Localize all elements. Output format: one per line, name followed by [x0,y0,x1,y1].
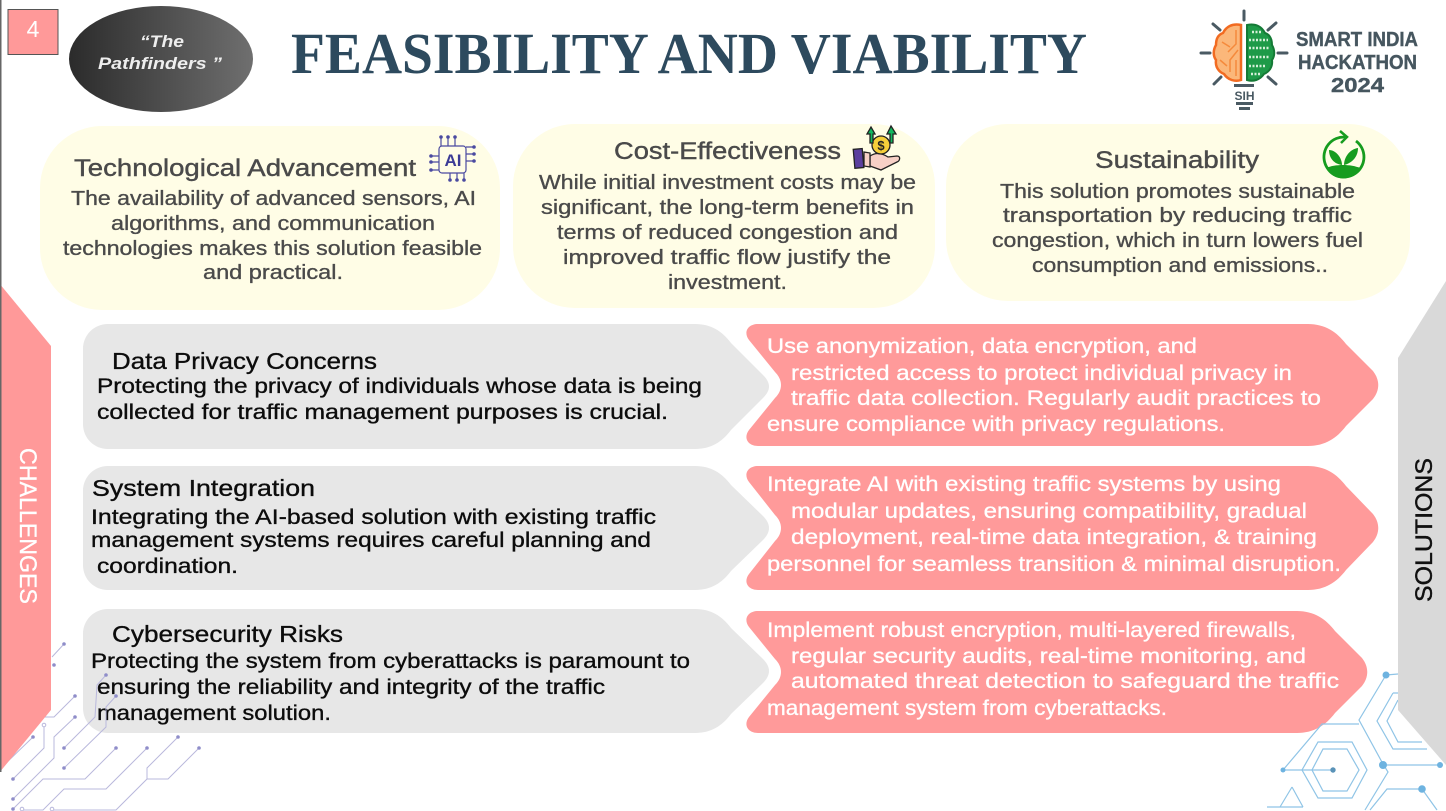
solution: data privacy: ensure compliance with privacy regulations. [767,413,1225,436]
circuit decoration: bottom right [1267,674,1440,810]
solution: data privacy [746,324,1378,446]
solution: data privacy: Use anonymization, data encryption, and [767,335,1197,358]
challenge: system integration: Integrating the AI-based solution with existing traffic [91,506,656,529]
solution: system integration: personnel for seamless transition & minimal disruption. [767,553,1341,576]
challenge: system integration: management systems requires careful planning and [91,529,651,552]
panel: sustainability [946,124,1410,301]
challenge: cybersecurity risks: management solution. [97,702,331,725]
logo brain left [1214,24,1241,81]
icon: sprout in circle [1324,131,1364,179]
panel: technological advancement: technologies makes this solution feasible [63,237,482,260]
logo: Smart India Hackathon 2024 [1201,11,1418,110]
band: challenges: CHALLENGES [14,448,41,604]
panel: cost-effectiveness [513,124,935,308]
panel: technological advancement [40,126,500,310]
panel: technological advancement: Technological Advancement [74,155,416,182]
slide number: 4 [27,16,40,42]
challenge: cybersecurity risks: ensuring the reliability and integrity of the traffic [97,676,605,699]
panel: sustainability: consumption and emissions.. [1032,254,1328,277]
icon: AI chip [429,135,476,182]
team name badge: Pathfinders ” [98,54,223,73]
logo rays [1201,11,1287,84]
solution: system integration [746,466,1378,590]
title: FEASIBILITY AND VIABILITY [291,21,1087,86]
circuit decoration: bottom left [2,644,199,811]
solution: system integration: deployment, real-time data integration, & training [791,526,1317,549]
logo circuit traces [1220,30,1238,76]
logo bulb base [1234,84,1254,110]
panel: cost-effectiveness: investment. [668,271,787,294]
logo binary [1249,32,1270,74]
panel: cost-effectiveness: improved traffic flow justify the [563,246,891,269]
panel: sustainability: transportation by reducing traffic [1003,204,1352,227]
solution: data privacy: traffic data collection. Regularly audit practices to [791,387,1321,410]
challenge: data privacy: collected for traffic management purposes is crucial. [97,401,668,424]
band: challenges [2,286,51,770]
challenge: system integration: coordination. [97,555,238,578]
icon: AI chip: AI [444,151,462,170]
challenge: system integration: System Integration [92,475,315,501]
challenge: data privacy: Data Privacy Concerns [112,348,377,374]
solution: cybersecurity risks [746,611,1367,733]
panel: technological advancement: The availability of advanced sensors, AI [71,187,476,210]
challenge: system integration [83,466,769,590]
solution: data privacy: restricted access to protect individual privacy in [791,362,1292,385]
logo: Smart India Hackathon 2024: HACKATHON [1298,52,1417,74]
panel: cost-effectiveness: Cost-Effectiveness [614,138,841,165]
challenge: cybersecurity risks: Cybersecurity Risks [112,621,343,647]
logo: Smart India Hackathon 2024: SMART INDIA [1296,29,1418,51]
icon: hand with coin: $ [877,138,885,153]
panel: sustainability: Sustainability [1095,147,1259,174]
panel: sustainability: congestion, which in turn lowers fuel [992,229,1363,252]
panel: technological advancement: and practical. [203,261,343,284]
icon: hand with coin [853,126,900,170]
solution: cybersecurity risks: regular security audits, real-time monitoring, and [791,645,1306,668]
panel: technological advancement: algorithms, and communication [111,212,435,235]
panel: cost-effectiveness: While initial investment costs may be [539,171,916,194]
panel: cost-effectiveness: terms of reduced congestion and [557,221,898,244]
solution: cybersecurity risks: Implement robust encryption, multi-layered firewalls, [767,619,1296,642]
team name badge: “The [140,32,184,51]
challenge: cybersecurity risks: Protecting the system from cyberattacks is paramount to [91,650,690,673]
slide number [8,10,58,54]
challenge: cybersecurity risks [83,609,769,733]
challenge: data privacy: Protecting the privacy of individuals whose data is being [97,375,702,398]
left edge line [0,0,2,772]
challenge: data privacy [83,324,769,449]
panel: cost-effectiveness: significant, the long-term benefits in [541,196,914,219]
solution: cybersecurity risks: automated threat detection to safeguard the traffic [791,670,1339,693]
circuit nodes: bottom left [11,642,201,811]
solution: system integration: modular updates, ensuring compatibility, gradual [791,500,1307,523]
solution: cybersecurity risks: management system from cyberattacks. [767,697,1167,720]
band: solutions: SOLUTIONS [1411,458,1438,602]
solution: system integration: Integrate AI with existing traffic systems by using [767,473,1281,496]
band: solutions [1398,281,1446,765]
team name badge [69,6,253,112]
logo brain right [1247,24,1274,81]
panel: sustainability: This solution promotes sustainable [1000,180,1355,203]
circuit nodes: bottom right [1280,672,1443,793]
logo: Smart India Hackathon 2024: SIH [1234,89,1255,103]
logo: Smart India Hackathon 2024: 2024 [1331,75,1385,97]
